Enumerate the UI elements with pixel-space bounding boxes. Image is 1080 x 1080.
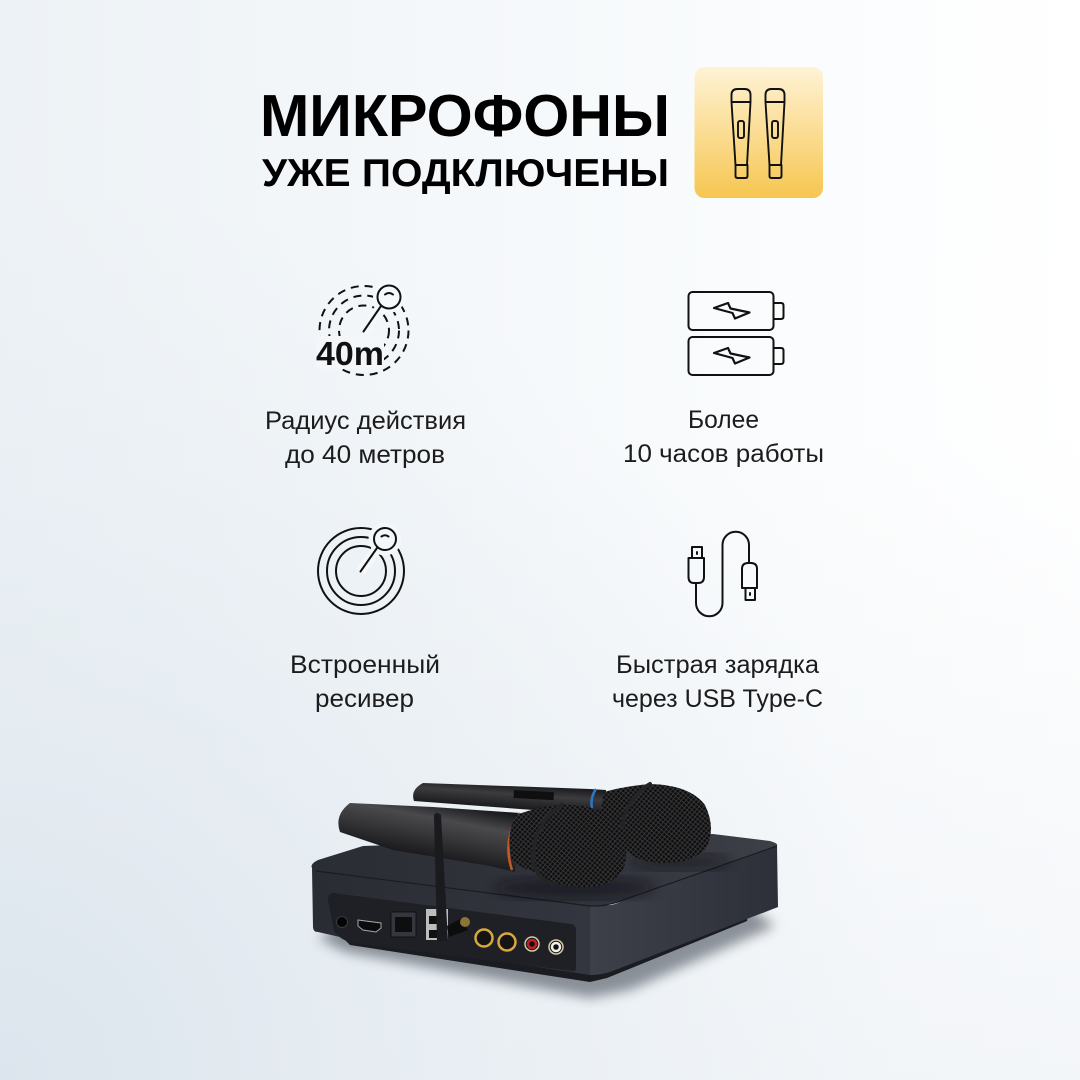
LAN port [391,912,416,937]
USB ports [426,909,448,940]
HDMI port [358,920,381,932]
icon: microphones on yellow card [694,67,823,198]
text: USB charging: через USB Type-C [612,685,823,713]
text: receiver: ресивер [315,685,414,713]
icon: built-in receiver [318,522,404,614]
photo: karaoke receiver with two microphones [311,783,778,998]
text: USB charging: Быстрая зарядка [616,651,819,679]
microphone jacks [476,930,492,946]
title: МИКРОФОНЫ [260,83,670,149]
front microphone [338,803,520,872]
text: receiver: Встроенный [290,651,440,679]
icon: 40 metre radius: 40m [316,335,384,372]
microphone shadow on device [495,877,655,899]
RCA red [525,937,539,951]
icon: USB cable [688,532,757,616]
device top [311,834,777,906]
antenna connector [447,918,468,937]
text: receiver [290,651,440,713]
text: USB charging [612,651,823,713]
DC power jack [336,916,348,928]
floor shadow [318,900,775,998]
text: battery [623,406,824,468]
text: battery: 10 часов работы [623,440,824,468]
text: radius: до 40 метров [285,441,445,469]
device foot [340,900,750,982]
device right side [590,845,778,975]
device front face [312,868,590,975]
top front edge [316,846,777,906]
text: battery: Более [688,406,759,434]
icon: 40 metre radius [316,281,408,375]
text: radius: Радиус действия [265,407,466,435]
title: УЖЕ ПОДКЛЮЧЕНЫ [262,152,669,195]
back microphone [413,783,606,815]
RCA white [549,940,563,954]
port panel [328,893,576,971]
text: radius [265,407,466,469]
icon: two batteries [688,292,784,375]
title [260,83,670,195]
antenna [434,813,448,941]
